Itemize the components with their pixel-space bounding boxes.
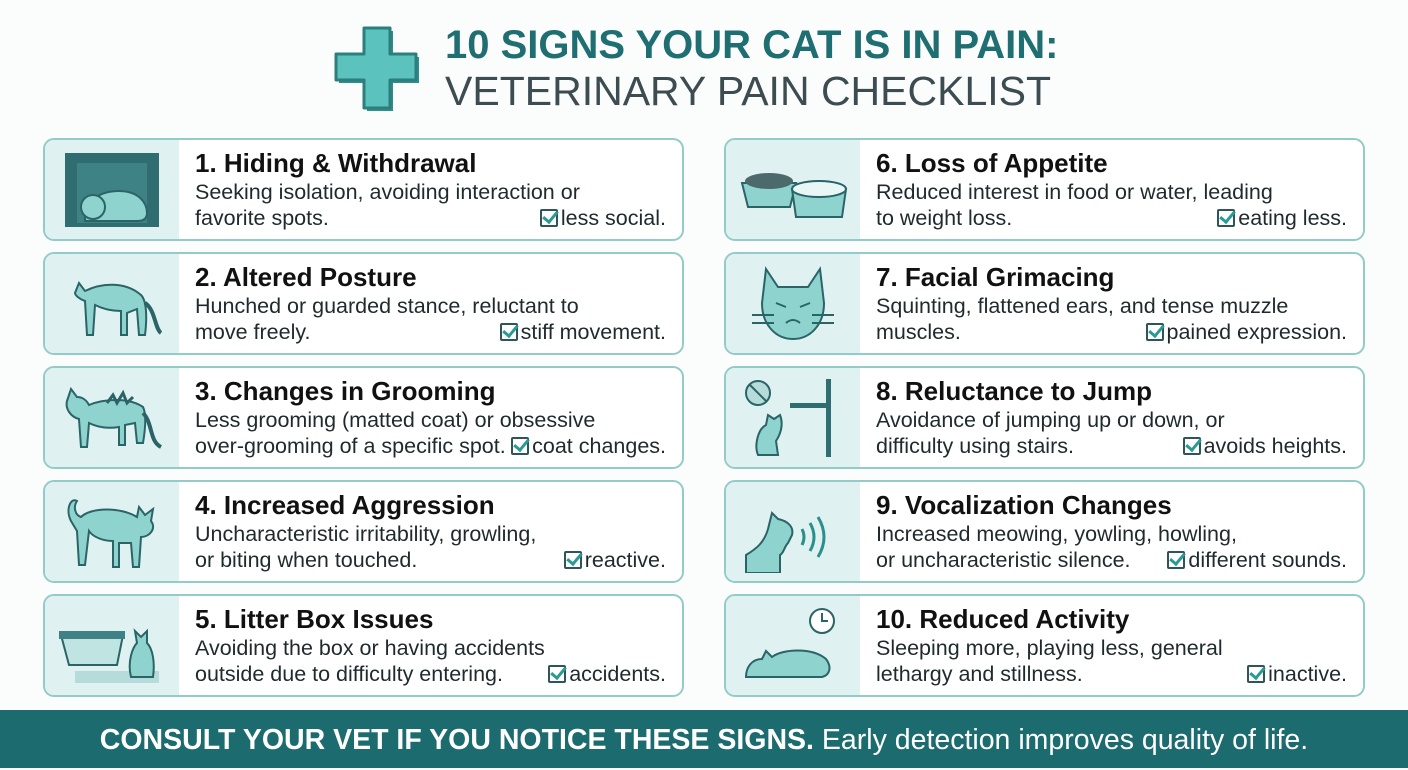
card 4: Uncharacteristic irritability, growling,: [195, 522, 536, 546]
card 3: Less grooming (matted coat) or obsessive: [195, 408, 595, 432]
card 5: accidents.: [569, 662, 666, 686]
icon: food bowls: [726, 140, 860, 239]
footer banner: [0, 710, 1408, 768]
card 9: or uncharacteristic silence.: [876, 548, 1131, 572]
card 8: difficulty using stairs.: [876, 434, 1074, 458]
card 6: eating less.: [1238, 206, 1347, 230]
card 9: different sounds.: [1188, 548, 1347, 572]
card 8: 8. Reluctance to Jump: [876, 376, 1152, 406]
card 8: avoids heights.: [1204, 434, 1347, 458]
card 4: [43, 480, 684, 583]
card 2: [43, 252, 684, 355]
title: [445, 23, 1058, 114]
card 4: 4. Increased Aggression: [195, 490, 495, 520]
card 3: 3. Changes in Grooming: [195, 376, 495, 406]
card 1: 1. Hiding & Withdrawal: [195, 148, 476, 178]
icon: cat below shelf: [726, 368, 860, 467]
header: [334, 23, 1058, 114]
card 8: [724, 366, 1365, 469]
card 10: inactive.: [1268, 662, 1347, 686]
card 8: Avoidance of jumping up or down, or: [876, 408, 1225, 432]
title: 10 SIGNS YOUR CAT IS IN PAIN:: [445, 23, 1058, 67]
card 6: Reduced interest in food or water, leading: [876, 180, 1273, 204]
icon: hunched cat: [45, 254, 179, 353]
card 1: Seeking isolation, avoiding interaction or: [195, 180, 580, 204]
card 1: [43, 138, 684, 241]
icon: aggressive cat: [45, 482, 179, 581]
card 10: Sleeping more, playing less, general: [876, 636, 1223, 660]
card 7: [724, 252, 1365, 355]
card 10: [724, 594, 1365, 697]
card 7: pained expression.: [1167, 320, 1347, 344]
icon: sleeping cat with clock: [726, 596, 860, 695]
card 2: move freely.: [195, 320, 310, 344]
icon: matted cat: [45, 368, 179, 467]
icon: litter box: [45, 596, 179, 695]
icon: meowing cat: [726, 482, 860, 581]
card 4: or biting when touched.: [195, 548, 417, 572]
icon: medical cross: [334, 26, 419, 111]
card 7: muscles.: [876, 320, 961, 344]
card 5: 5. Litter Box Issues: [195, 604, 433, 634]
card 2: stiff movement.: [521, 320, 666, 344]
card 6: 6. Loss of Appetite: [876, 148, 1108, 178]
footer banner: CONSULT YOUR VET IF YOU NOTICE THESE SIGNS. Early detection improves quality of life.: [100, 724, 1308, 756]
card 6: [724, 138, 1365, 241]
card 7: Squinting, flattened ears, and tense muzzle: [876, 294, 1288, 318]
card 7: 7. Facial Grimacing: [876, 262, 1114, 292]
card 10: lethargy and stillness.: [876, 662, 1083, 686]
icon: grimacing cat face: [726, 254, 860, 353]
title: VETERINARY PAIN CHECKLIST: [445, 68, 1051, 114]
card 9: 9. Vocalization Changes: [876, 490, 1172, 520]
card 1: less social.: [561, 206, 666, 230]
card 9: Increased meowing, yowling, howling,: [876, 522, 1237, 546]
card 2: 2. Altered Posture: [195, 262, 417, 292]
card 9: [724, 480, 1365, 583]
card 6: to weight loss.: [876, 206, 1012, 230]
card 4: reactive.: [585, 548, 666, 572]
card 3: [43, 366, 684, 469]
icon: cat hiding in box: [45, 140, 179, 239]
card 3: coat changes.: [532, 434, 666, 458]
card 5: outside due to difficulty entering.: [195, 662, 503, 686]
card 10: 10. Reduced Activity: [876, 604, 1129, 634]
card 3: over-grooming of a specific spot.: [195, 434, 506, 458]
card 5: Avoiding the box or having accidents: [195, 636, 545, 660]
card 2: Hunched or guarded stance, reluctant to: [195, 294, 579, 318]
card 1: favorite spots.: [195, 206, 329, 230]
card 5: [43, 594, 684, 697]
